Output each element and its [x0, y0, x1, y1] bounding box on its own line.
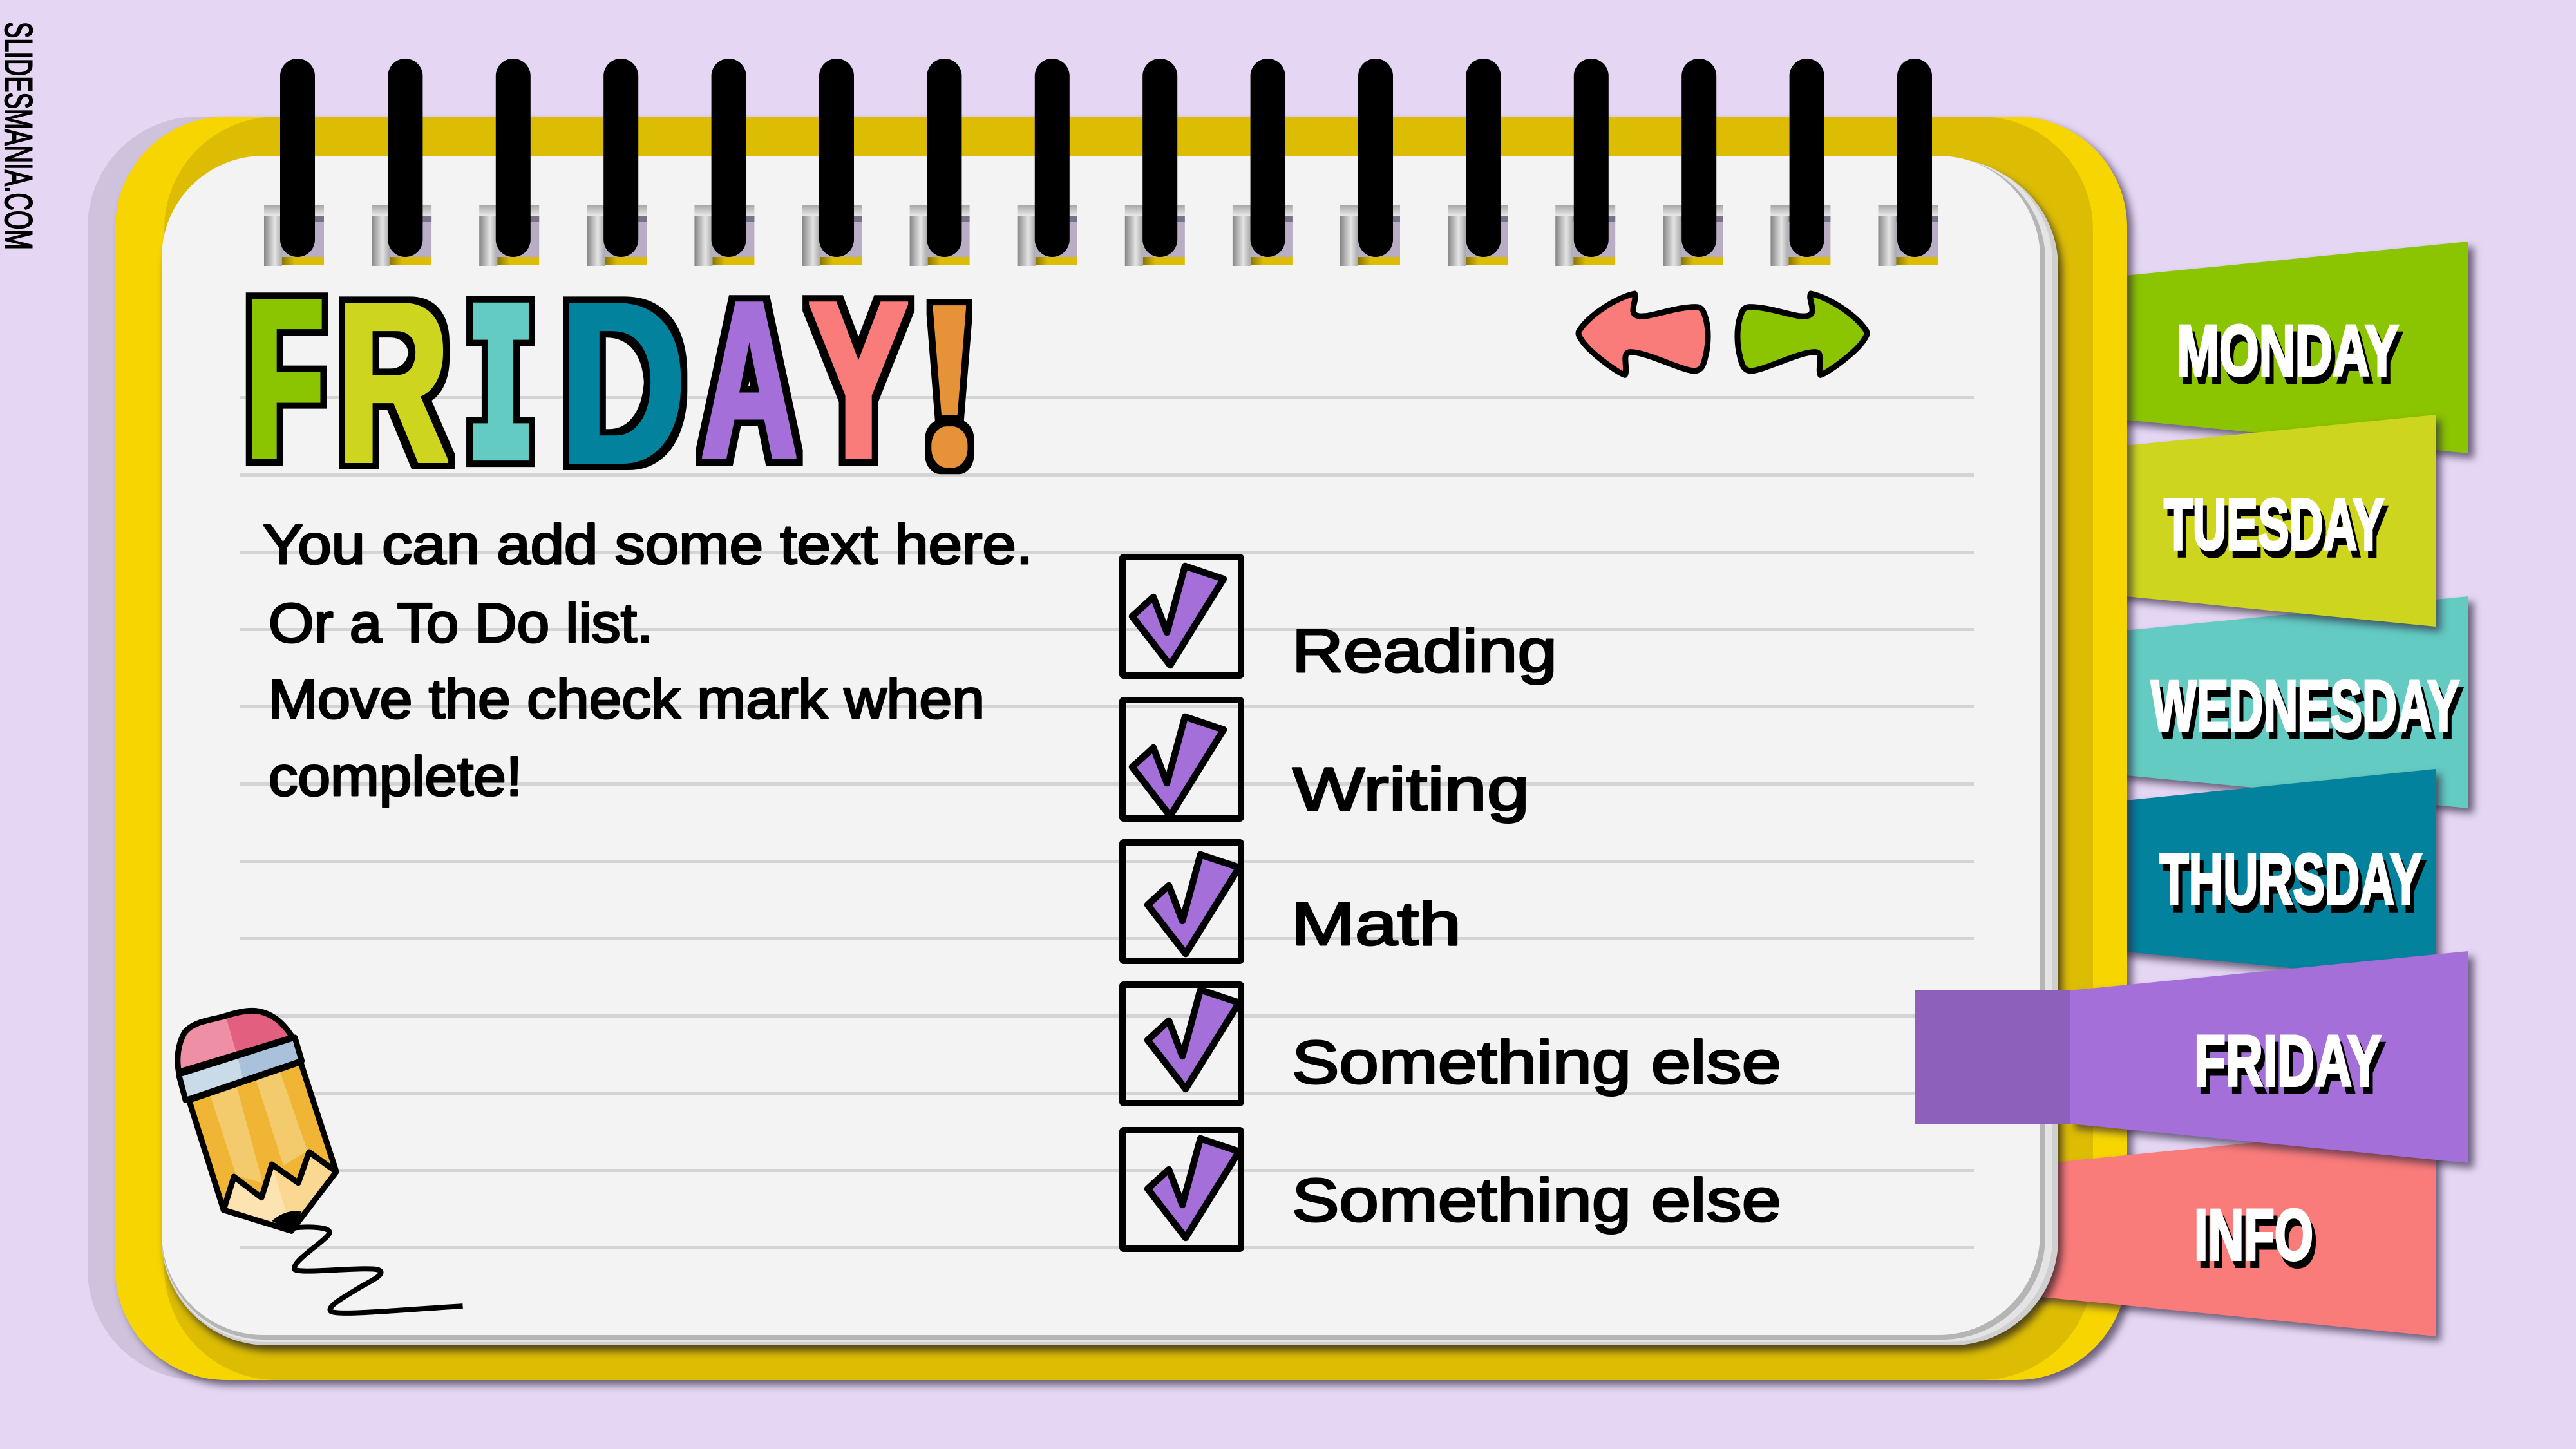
- to-do list labels: Math: [1291, 890, 1461, 958]
- tab: Info: [2029, 1124, 2436, 1336]
- tab: Tuesday: [2112, 415, 2436, 627]
- checkbox 4: [1122, 985, 1241, 1103]
- to-do list labels: Writing: [1293, 755, 1530, 824]
- checkbox 2: [1122, 700, 1241, 819]
- spiral holes: [264, 205, 1938, 266]
- text block: instructions: [263, 514, 1033, 808]
- title: FRIDAY!: F: [247, 252, 323, 504]
- text block: instructions: Or a To Do list.: [269, 592, 653, 654]
- text block: instructions: You can add some text here.: [263, 514, 1033, 576]
- tab: Wednesday: [2112, 596, 2468, 808]
- spiral rings: [280, 59, 1932, 257]
- title: FRIDAY!: R: [337, 255, 449, 511]
- text block: instructions: complete!: [269, 746, 522, 808]
- title: FRIDAY!: A: [701, 254, 797, 506]
- title: FRIDAY!: I: [469, 269, 533, 502]
- ruled lines: [240, 396, 1974, 1249]
- title: FRIDAY!: !: [918, 250, 981, 515]
- checkbox 3: [1122, 842, 1241, 961]
- arrow: previous: [1578, 294, 1708, 375]
- to-do list labels: Something else: [1292, 1166, 1781, 1235]
- tab: Tuesday: TUESDAY: [2164, 484, 2384, 565]
- arrow: next: [1738, 294, 1867, 375]
- tab: Thursday: THURSDAY: [2159, 839, 2422, 920]
- icon: pencil with squiggle: [178, 1010, 463, 1313]
- to-do list labels: Something else: [1292, 1028, 1781, 1097]
- title: FRIDAY!: D: [560, 255, 686, 512]
- checkbox 1: [1122, 557, 1241, 676]
- tab: Thursday: [2112, 769, 2436, 982]
- tab: Monday: [2112, 242, 2468, 453]
- title: FRIDAY!: Y: [809, 254, 908, 506]
- checkbox 5: [1122, 1130, 1241, 1249]
- tab: Friday (active): FRIDAY: [2194, 1021, 2382, 1101]
- to-do list labels: Reading: [1292, 617, 1557, 685]
- tab: Monday: MONDAY: [2177, 310, 2399, 391]
- paper stack: [162, 156, 2058, 1345]
- tab: Info: INFO: [2194, 1195, 2313, 1275]
- tab: Friday (active): [1915, 951, 2468, 1163]
- title: FRIDAY!: [247, 250, 981, 515]
- text block: instructions: Move the check mark when: [269, 668, 985, 730]
- notebook cover: [88, 117, 2127, 1380]
- to-do list labels: [1291, 617, 1781, 1235]
